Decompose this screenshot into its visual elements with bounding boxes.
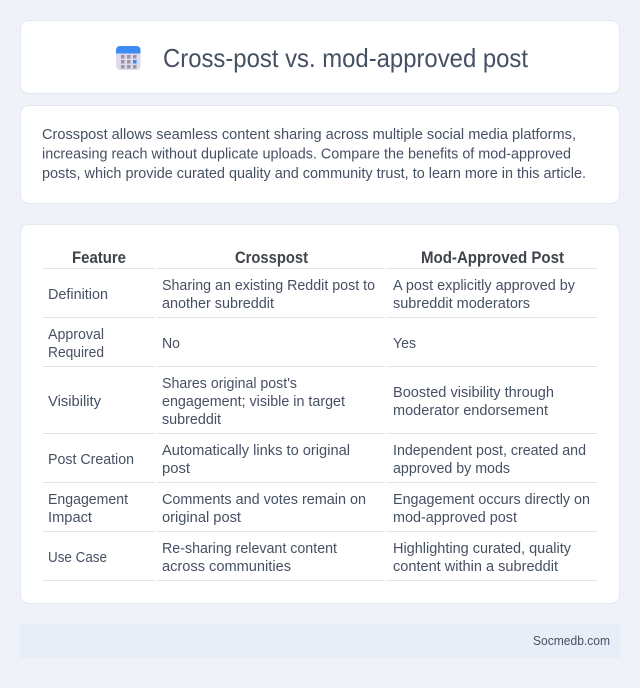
row: use case: across communities — [162, 559, 291, 575]
row: post creation: Automatically links to original — [162, 443, 350, 459]
intro text: posts, which provide curated quality and community trust, to learn more in this article. — [42, 165, 586, 182]
row: use case: Highlighting curated, quality — [393, 541, 572, 557]
row: definition: subreddit moderators — [393, 296, 530, 312]
title: Cross-post vs. mod-approved post — [163, 45, 528, 73]
row: post creation: approved by mods — [393, 461, 510, 477]
intro text: increasing reach without duplicate uploads. Compare the benefits of mod-approved — [42, 146, 571, 162]
row: approval required: Approval — [48, 327, 104, 343]
row: visibility: Shares original post's — [162, 376, 297, 392]
row: definition: Sharing an existing Reddit post to — [162, 278, 375, 294]
row: engagement impact: Comments and votes remain on — [162, 492, 366, 508]
row: definition: Definition — [48, 287, 108, 303]
row: post creation: post — [162, 461, 190, 477]
row: visibility: Visibility — [48, 394, 102, 410]
row: use case: Re-sharing relevant content — [162, 541, 337, 557]
icon: calendar — [116, 46, 140, 70]
table header: Mod-Approved Post — [421, 249, 564, 267]
panel: intro — [20, 106, 620, 204]
row: use case: Use Case — [48, 550, 107, 566]
row: definition — [48, 278, 576, 312]
row: visibility: Boosted visibility through — [393, 385, 554, 401]
row: engagement impact: Engagement occurs directly on — [393, 492, 590, 508]
panel: title card — [20, 20, 620, 94]
row: engagement impact: original post — [162, 510, 241, 526]
row: use case — [48, 541, 572, 575]
row: post creation: Independent post, created and — [393, 443, 586, 459]
row: engagement impact: Engagement — [48, 492, 128, 508]
row: visibility: moderator endorsement — [393, 403, 548, 419]
row: post creation: Post Creation — [48, 452, 134, 468]
row: definition: A post explicitly approved by — [393, 278, 576, 294]
row: definition: another subreddit — [162, 296, 274, 312]
row: approval required: No — [162, 336, 180, 352]
row: approval required: Required — [48, 345, 104, 361]
table header — [72, 249, 564, 267]
row: visibility — [48, 376, 554, 428]
footer — [20, 624, 620, 658]
row: approval required: Yes — [393, 336, 416, 352]
row: use case: content within a subreddit — [393, 559, 558, 575]
intro text: Crosspost allows seamless content sharing across multiple social media platforms, — [42, 126, 576, 143]
table header: Crosspost — [235, 249, 308, 267]
table header: Feature — [72, 249, 126, 267]
panel: comparison table — [20, 224, 620, 604]
row: post creation — [48, 443, 586, 477]
row: visibility: engagement; visible in target — [162, 394, 345, 410]
row: engagement impact: mod-approved post — [393, 510, 517, 526]
row: approval required — [48, 327, 416, 361]
footer: Socmedb.com — [533, 633, 610, 648]
row: engagement impact — [48, 492, 590, 526]
row: visibility: subreddit — [162, 412, 221, 428]
row: engagement impact: Impact — [48, 510, 92, 526]
intro text — [42, 126, 586, 182]
